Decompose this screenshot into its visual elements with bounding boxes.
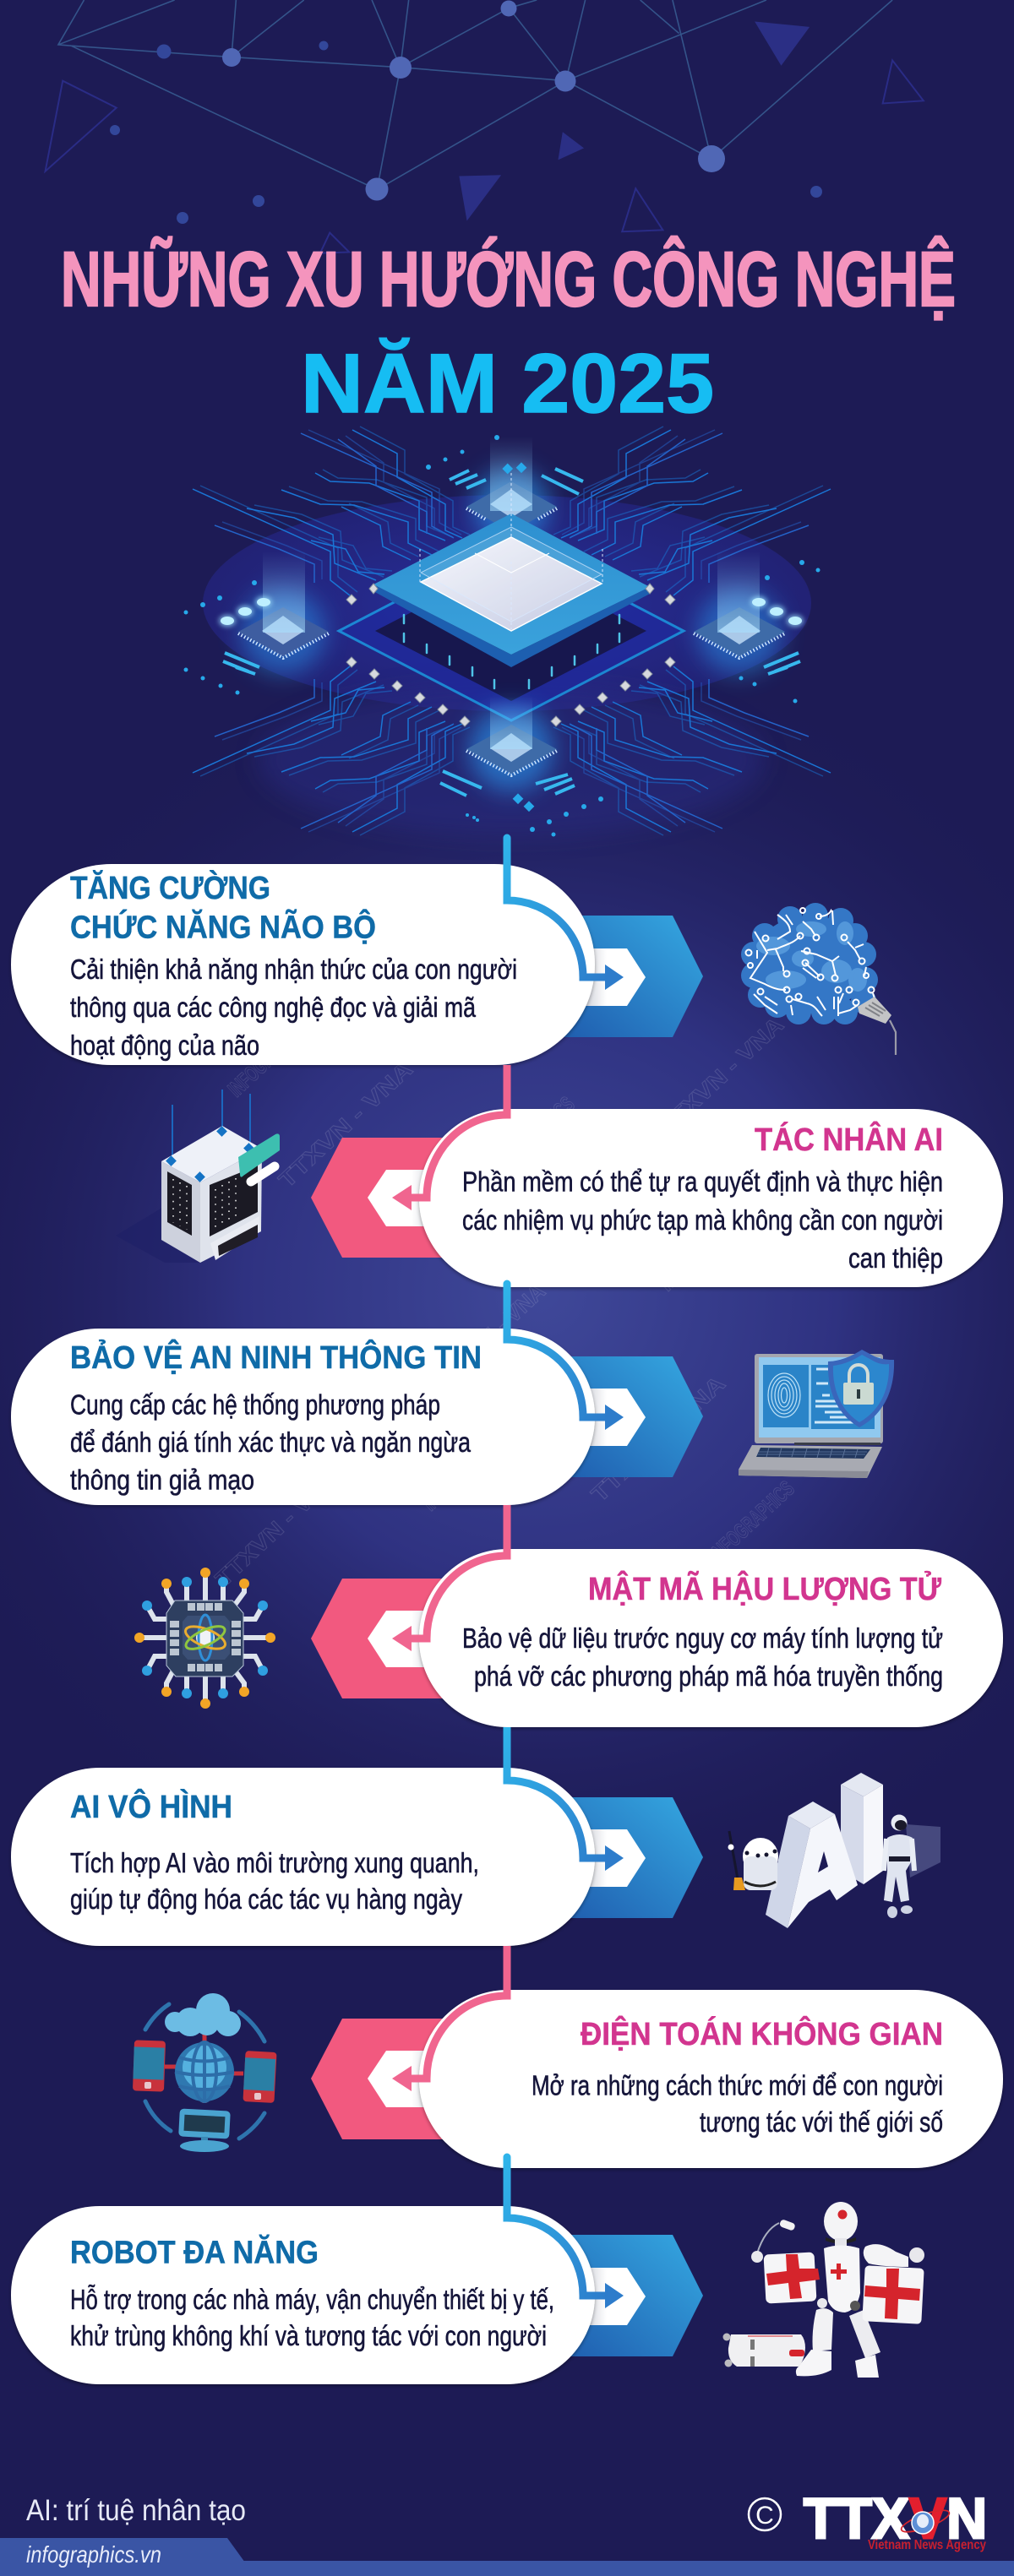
watermarks: TTXVN - VNA (586, 1370, 730, 1507)
title line 2: NĂM 2025 (301, 336, 714, 430)
icon: AI letters with robots (728, 1773, 940, 1928)
arrow hexagon (558, 2235, 703, 2356)
body text: can thiệp (848, 1242, 943, 1274)
panel: tăng cường chức năng não bộ (11, 838, 703, 1065)
watermarks: INFOGRAPHICS (705, 1475, 799, 1566)
watermarks: INFOGRAPHICS (223, 1011, 318, 1101)
heading (70, 869, 376, 946)
watermarks: TTXVN - VNA (654, 1012, 788, 1139)
footnote: AI: trí tuệ nhân tạo (26, 2494, 246, 2527)
panel: điện toán không gian (311, 1946, 1003, 2168)
arrow hexagon (558, 1356, 703, 1477)
body text (70, 1847, 479, 1915)
icon: medical robot (723, 2202, 924, 2378)
panel: bảo vệ an ninh thông tin (11, 1284, 703, 1505)
panel: tác nhân AI (311, 1065, 1003, 1287)
body text (532, 2069, 943, 2138)
watermarks (210, 1011, 799, 1591)
connector (507, 1284, 624, 1430)
body text: Tích hợp AI vào môi trường xung quanh, (70, 1847, 479, 1878)
connector (392, 1065, 507, 1210)
watermarks: TTXVN - VNA (274, 1056, 417, 1193)
connector (392, 1505, 507, 1651)
body text (70, 2284, 554, 2351)
body text: thông qua các công nghệ đọc và giải mã (70, 992, 477, 1023)
icon: server (116, 1090, 280, 1263)
illustration: circuit chip (184, 427, 831, 836)
body text (70, 954, 517, 1061)
connector (507, 2157, 624, 2308)
body text: giúp tự động hóa các tác vụ hàng ngày (70, 1883, 462, 1915)
heading: ĐIỆN TOÁN KHÔNG GIAN (581, 2014, 943, 2052)
watermarks: TTXVN - VNA (434, 1278, 550, 1389)
connector (507, 838, 624, 990)
body text: Cung cấp các hệ thống phương pháp (70, 1389, 440, 1421)
heading: TÁC NHÂN AI (755, 1121, 943, 1158)
body text: khử trùng không khí và tương tác với con người (70, 2320, 547, 2351)
heading: ROBOT ĐA NĂNG (70, 2233, 319, 2270)
body text: để đánh giá tính xác thực và ngăn ngừa (70, 1427, 472, 1458)
footer bar (0, 2538, 1014, 2576)
connector (392, 1946, 507, 2091)
body text (462, 1622, 943, 1692)
watermarks: INFOGRAPHICS (417, 1425, 512, 1515)
watermarks: INFOGRAPHICS (485, 1091, 580, 1182)
studs (346, 584, 675, 726)
socket (339, 541, 684, 720)
icon: laptop with shield (739, 1350, 894, 1478)
heading: MẬT MÃ HẬU LƯỢNG TỬ (588, 1570, 941, 1607)
body text (70, 1389, 472, 1495)
body text: tương tác với thế giới số (700, 2106, 943, 2138)
connector (507, 1727, 624, 1871)
heading: BẢO VỆ AN NINH THÔNG TIN (70, 1338, 482, 1376)
panel: mật mã hậu lượng tử (311, 1505, 1003, 1727)
panel: robot đa năng (11, 2157, 703, 2384)
title (61, 236, 956, 430)
logo: TTXVN: TTXVN (804, 2486, 987, 2551)
arrow hexagon (311, 1579, 465, 1698)
body text (462, 1166, 943, 1274)
logo: TTXVN: Vietnam News Agency (868, 2538, 986, 2552)
watermarks: INFOGRAPHICS (654, 1174, 782, 1296)
watermarks: TTXVN - VNA (210, 1464, 345, 1591)
heading: AI VÔ HÌNH (70, 1787, 232, 1825)
heading: CHỨC NĂNG NÃO BỘ (70, 907, 376, 946)
body text: Cải thiện khả năng nhận thức của con người (70, 954, 517, 985)
icon: cloud and globe (133, 1993, 277, 2152)
icon: brain (741, 903, 896, 1055)
body text: thông tin giả mạo (70, 1465, 254, 1495)
main processor (373, 473, 650, 667)
icon: quantum chip (134, 1568, 275, 1709)
panel: AI vô hình (11, 1727, 703, 1946)
stripes and dots (184, 435, 820, 836)
source url: infographics.vn (26, 2541, 161, 2568)
heading: TĂNG CƯỜNG (70, 869, 270, 906)
arrow hexagon (558, 916, 703, 1037)
arrow hexagon (558, 1797, 703, 1918)
arrow hexagon (311, 2019, 465, 2139)
arrow hexagon (311, 1138, 465, 1258)
network decoration (46, 0, 924, 253)
small chips (238, 437, 785, 791)
copyright mark: C (755, 2502, 774, 2530)
body text: hoạt động của não (70, 1030, 259, 1061)
copyright mark (749, 2498, 781, 2530)
body text: Hỗ trợ trong các nhà máy, vận chuyển thiết bị y tế, (70, 2284, 554, 2315)
